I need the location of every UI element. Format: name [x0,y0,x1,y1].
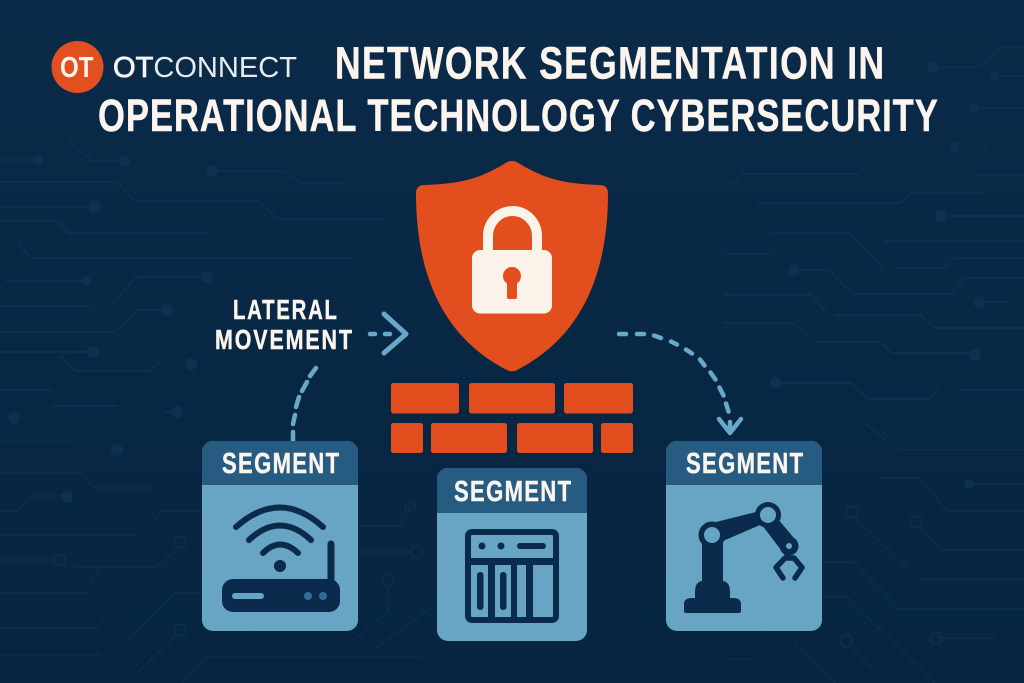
panel: segment with server [437,468,587,641]
card header [666,441,822,485]
panel: segment with router [202,441,358,631]
heading: SEGMENT [454,476,571,508]
label: lateral movement: MOVEMENT [215,326,352,356]
card body [666,441,822,631]
card body [437,468,587,641]
logo badge [52,41,104,93]
padlock [472,211,552,314]
logo wordmark: OTCONNECT [113,52,297,84]
icon: shield with padlock [416,161,608,371]
card header [202,441,358,485]
logo: OTConnect [52,41,297,93]
shield [416,161,608,371]
arrow: lateral movement toward shield [370,314,406,353]
panel: segment with robot arm [666,441,822,631]
heading: SEGMENT [686,448,803,480]
icon: wifi router [222,508,340,612]
heading: SEGMENT [222,448,339,480]
card body [202,441,358,631]
arrow: dashed curve to right segment [619,334,741,433]
arrow: dashed curve from left segment [293,368,316,441]
logo badge: OT [60,52,94,84]
label: lateral movement [215,295,352,356]
icon: server rack [468,532,556,622]
title: NETWORK SEGMENTATION IN [335,37,884,89]
title [98,37,938,141]
title: OPERATIONAL TECHNOLOGY CYBERSECURITY [98,89,938,141]
label: lateral movement: LATERAL [233,295,337,326]
firewall bricks [391,383,633,453]
icon: robot arm [684,502,802,613]
card header [437,468,587,513]
